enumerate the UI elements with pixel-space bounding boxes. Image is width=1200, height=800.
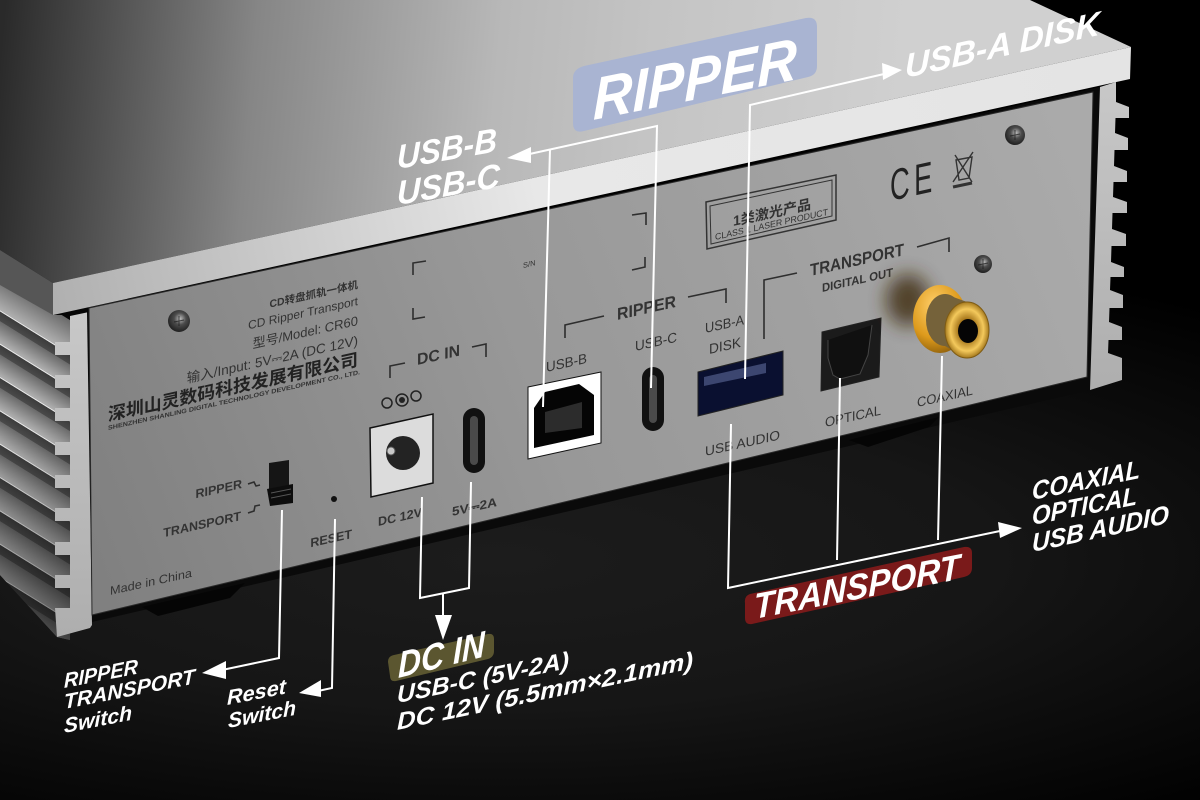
- callout: TRANSPORT: TRANSPORT: [754, 546, 963, 627]
- front lip of lid: [53, 47, 1131, 315]
- S/N area: [413, 213, 646, 319]
- CE mark: CE: [890, 152, 932, 211]
- left heat sink fins: [0, 277, 72, 655]
- callout: ripper transport switch: TRANSPORT: [64, 665, 197, 714]
- callout: digital outputs list: [1032, 454, 1169, 558]
- made in china: Made in China: [110, 566, 192, 598]
- optical port: [821, 318, 881, 391]
- arrow: reset: [299, 519, 335, 697]
- rubber foot right: [849, 417, 939, 447]
- DC IN group: DC 12V: [378, 505, 423, 529]
- screw left: [168, 310, 190, 332]
- arrow: DC IN: [420, 482, 471, 640]
- rubber foot left: [142, 583, 245, 616]
- model info text block: CD转盘抓轨一体机: [269, 278, 358, 311]
- callout: DC input specs: USB-C (5V-2A): [397, 647, 569, 709]
- callout: reset switch: Reset: [227, 676, 287, 710]
- model info text block: 型号/Model: CR60: [253, 313, 358, 351]
- arrow: transport outputs: [728, 356, 1022, 588]
- RIPPER group: [528, 289, 745, 459]
- TRANSPORT digital out group: [705, 238, 989, 459]
- arrow: mode switch: [202, 510, 282, 679]
- callout: RIPPER: RIPPER: [593, 25, 797, 133]
- switch: TRANSPORT: [163, 509, 241, 540]
- callout: USB-B USB-C: USB-B: [397, 122, 497, 177]
- callout: DC IN: DC IN: [398, 623, 486, 686]
- reset button: [310, 496, 352, 550]
- right heat sink pillar: [1090, 82, 1129, 390]
- S/N area: S/N: [523, 258, 535, 270]
- screw top right: [1005, 125, 1025, 145]
- TRANSPORT digital out group: OPTICAL: [825, 403, 881, 430]
- TRANSPORT digital out group: COAXIAL: [917, 383, 973, 410]
- left corner pillar with teeth: [55, 312, 92, 637]
- callout: digital outputs list: COAXIAL: [1032, 454, 1140, 506]
- model info text block: 深圳山灵数码科技发展有限公司: [108, 349, 358, 425]
- callout: reset switch: Switch: [228, 697, 296, 733]
- coaxial RCA port: [886, 274, 989, 358]
- laser product label: [706, 175, 836, 249]
- model info text block: [108, 278, 360, 432]
- callout: USB-B USB-C: USB-C: [397, 157, 501, 213]
- screw right: [974, 255, 992, 273]
- callout: ripper transport switch: [64, 656, 197, 738]
- model info text block: 输入/Input: 5V⎓2A (DC 12V): [187, 333, 358, 386]
- RIPPER group: USB-B: [546, 351, 587, 376]
- callout: USB-B USB-C: [397, 122, 501, 213]
- switch: RIPPER: [195, 477, 242, 501]
- USB-C port: [642, 367, 664, 431]
- rear panel plate: [89, 92, 1093, 615]
- callout: ripper transport switch: RIPPER: [64, 656, 139, 693]
- TRANSPORT digital out group: DIGITAL OUT: [822, 265, 894, 295]
- callout: USB-A DISK: USB-A DISK: [905, 5, 1102, 86]
- RIPPER group: USB-C: [635, 330, 677, 355]
- WEEE bin icon: [953, 152, 973, 187]
- lip side shade: [0, 250, 53, 315]
- top surface: [0, 0, 1131, 283]
- TRANSPORT digital out group: TRANSPORT: [810, 239, 904, 280]
- plate surface: [89, 92, 1093, 615]
- device chassis: [0, 0, 1131, 655]
- DC IN group: 5V⎓2A: [452, 495, 497, 519]
- TRANSPORT digital out group: USB AUDIO: [705, 428, 780, 459]
- callout: digital outputs list: USB AUDIO: [1032, 499, 1169, 558]
- USB-B port: [528, 372, 601, 459]
- chassis dark backing: [87, 87, 1100, 622]
- model info text block: SHENZHEN SHANLING DIGITAL TECHNOLOGY DEVELOPMENT CO., LTD.: [108, 369, 360, 432]
- RIPPER group: USB-A: [705, 312, 745, 337]
- DC IN group: DC IN: [417, 342, 460, 369]
- reset button: RESET: [310, 527, 352, 550]
- DC IN group: [370, 342, 497, 529]
- arrow: USB-B and USB-C: [507, 126, 657, 407]
- laser product label: CLASS 1 LASER PRODUCT: [715, 207, 828, 242]
- RIPPER group: RIPPER: [617, 291, 677, 324]
- switch: [163, 460, 293, 540]
- model info text block: CD Ripper Transport: [248, 294, 359, 332]
- USB-A port: [698, 351, 783, 416]
- callout: reset switch: [227, 676, 296, 733]
- callout: digital outputs list: OPTICAL: [1032, 481, 1137, 531]
- laser product label: 1类激光产品: [733, 196, 811, 230]
- callout: DC input specs: DC 12V (5.5mm×2.1mm): [397, 647, 693, 736]
- RIPPER group: DISK: [709, 335, 742, 358]
- callout: ripper transport switch: Switch: [64, 702, 132, 738]
- arrow: USB-A disk: [745, 63, 902, 379]
